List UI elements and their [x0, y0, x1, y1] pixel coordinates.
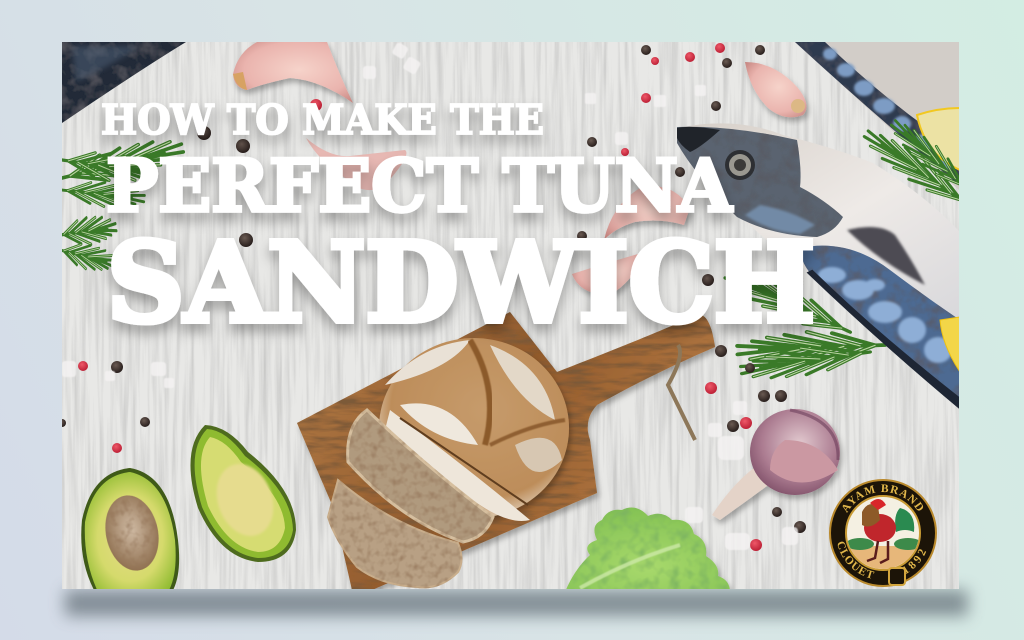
title	[101, 96, 815, 347]
fish: main mackerel	[677, 123, 960, 407]
garlic clove: behind title	[306, 138, 406, 190]
fish: top-left corner	[62, 42, 186, 123]
Ayam Brand logo seal	[829, 479, 937, 587]
panel: white wood background	[62, 42, 959, 589]
rosemary: left sprigs	[62, 140, 186, 271]
avocado pit	[105, 495, 159, 571]
garlic clove: top right	[745, 62, 807, 117]
garlic clove: top	[233, 42, 353, 103]
lemon: top right	[917, 108, 960, 170]
peppercorns: red	[78, 43, 762, 551]
garlic bulb	[712, 409, 840, 520]
fish body	[686, 124, 959, 316]
title line 1: HOW TO MAKE THE	[101, 96, 544, 144]
seal rooster	[862, 499, 914, 563]
lettuce	[565, 508, 730, 592]
panel drop shadow	[65, 590, 968, 616]
board string	[668, 345, 695, 440]
avocado: half with pit	[81, 468, 179, 592]
seal lettering: CLOUET	[838, 542, 874, 578]
fish head dark	[677, 127, 843, 237]
avocado: half without pit	[190, 425, 296, 562]
fish blue markings	[818, 267, 952, 363]
rosemary: under fish	[723, 276, 886, 380]
fish lower dark edge	[810, 272, 960, 407]
title line 3: SANDWICH	[107, 218, 815, 347]
seal scene	[848, 538, 918, 569]
peppercorns: black	[58, 45, 806, 533]
garlic clove: centre upper	[604, 186, 690, 240]
garlic clove: centre lower	[572, 252, 645, 295]
bread slice: back	[348, 410, 493, 542]
fish blue back	[800, 246, 960, 407]
rosemary: over fish	[862, 119, 959, 202]
seal barrel buckle	[889, 568, 905, 585]
bread slice: front	[328, 480, 462, 587]
fish dark side patch	[847, 227, 925, 285]
title line 2: PERFECT TUNA	[106, 143, 733, 228]
fish eye	[725, 150, 755, 180]
seal lettering: 1892	[903, 549, 926, 574]
bread loaf	[379, 338, 569, 521]
fish: upper second fish	[795, 42, 959, 190]
cutting board	[297, 312, 715, 590]
seal lettering: AYAM BRAND	[842, 484, 924, 513]
sea salt crystals	[62, 42, 798, 550]
seal lettering	[838, 484, 926, 578]
lemon: lower right	[940, 317, 960, 372]
